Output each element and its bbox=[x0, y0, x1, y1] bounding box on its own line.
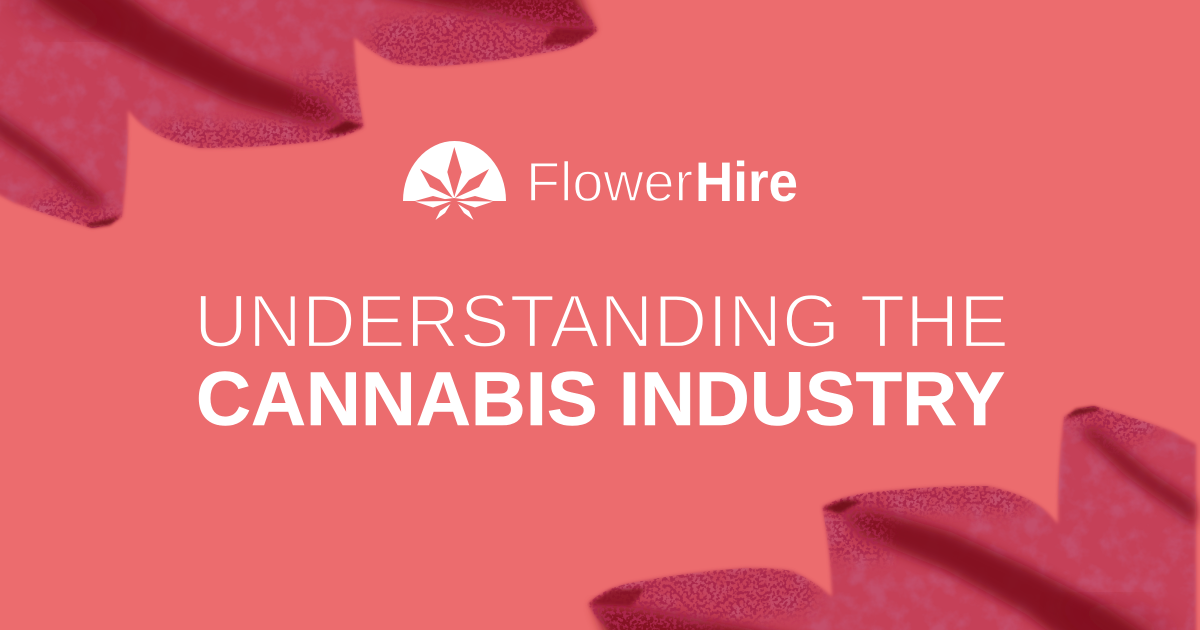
title: line two: CANNABIS INDUSTRY bbox=[196, 357, 1005, 442]
leaf: top left bbox=[0, 0, 602, 232]
leaf: bottom right bbox=[584, 402, 1196, 630]
logo bbox=[403, 141, 798, 220]
icon: cannabis leaf in dome bbox=[403, 141, 506, 220]
logo wordmark: Flower: Flower bbox=[526, 150, 693, 213]
logo wordmark: Hire: Hire bbox=[695, 150, 798, 213]
title: line one: UNDERSTANDING THE bbox=[194, 279, 1009, 363]
